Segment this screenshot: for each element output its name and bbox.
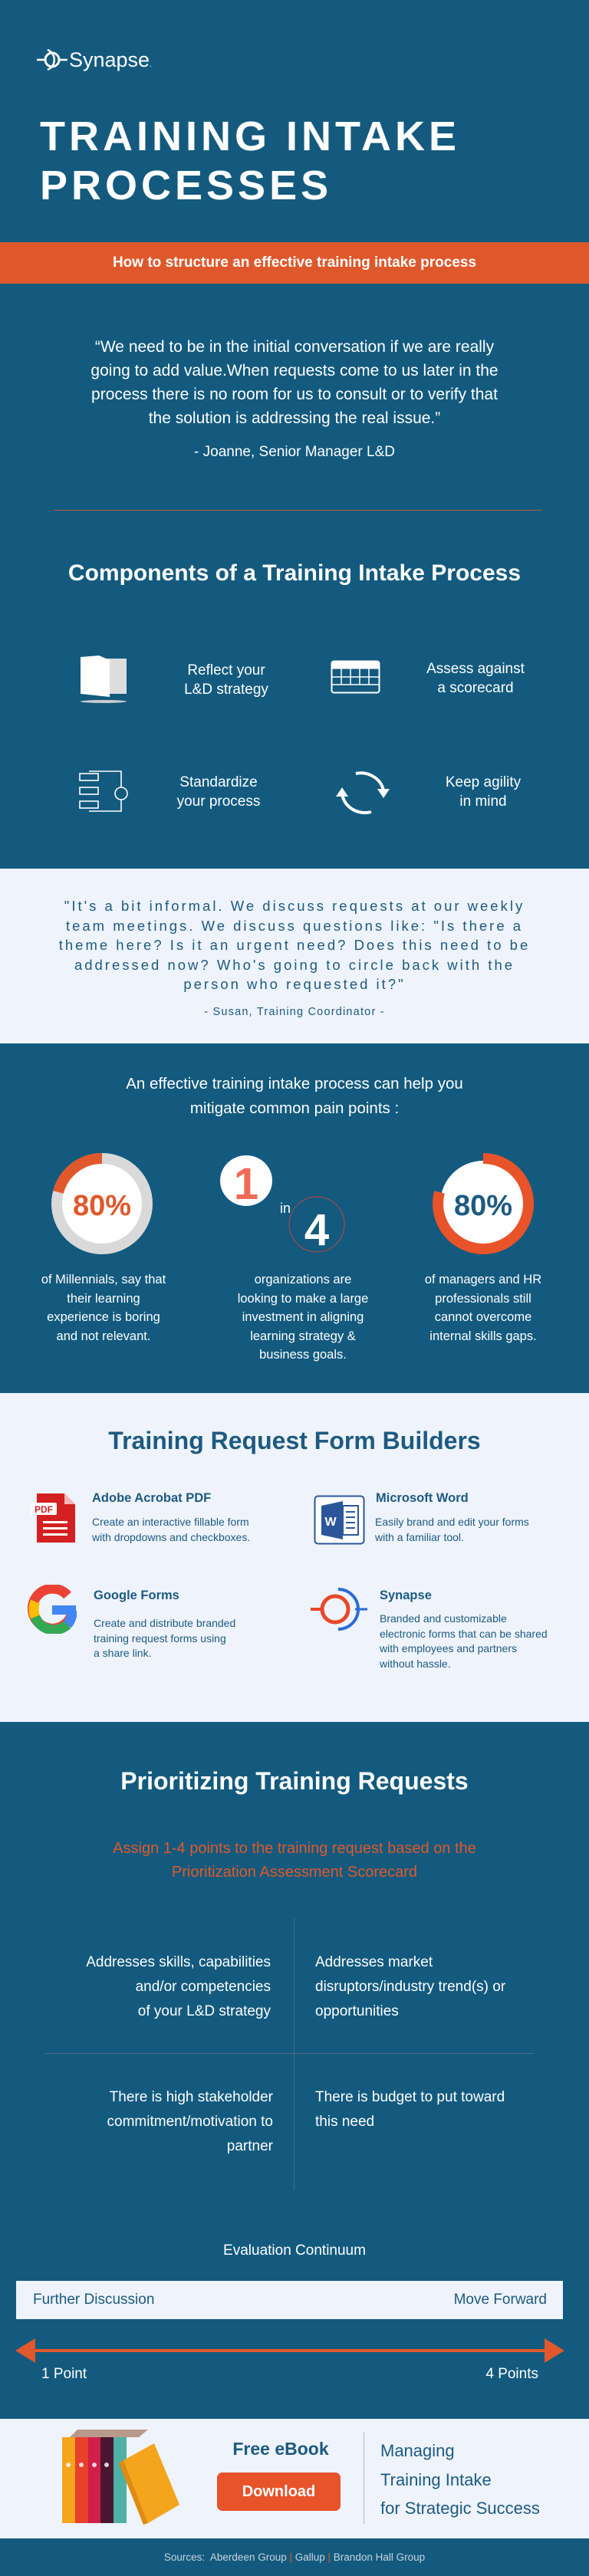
stat: 80% managers: professionals still [435,1291,531,1305]
icon: cycle arrows [336,771,390,814]
item: Synapse: Synapse [380,1589,432,1602]
criterion: stakeholder: There is high stakeholder [110,2089,273,2105]
icon: flowchart [79,770,128,812]
criterion: budget [315,2089,505,2130]
item: Google Forms: Google Forms [94,1589,179,1602]
heading: Training Request Form Builders [108,1427,481,1454]
stat: 80% managers: of managers and HR [425,1273,541,1286]
panel: form builders: without hassle. [380,1658,451,1670]
stat: 1 in 4: in [280,1201,291,1216]
item: Synapse: with employees and partners [380,1642,517,1654]
item: Synapse: Branded and customizable [380,1612,507,1625]
panel: Susan quote: person who requested it?" [183,976,406,992]
criterion: budget: this need [315,2114,374,2130]
criterion: stakeholder: partner [227,2138,273,2154]
stat: 1 in 4: investment in aligning [242,1310,364,1324]
criterion: market: disruptors/industry trend(s) or [315,1979,505,1995]
title: PROCESSES [40,163,332,209]
stat: 80% millennials: of Millennials, say that [41,1273,166,1286]
quote: Joanne: - Joanne, Senior Manager L&D [194,444,395,460]
panel: Susan quote [0,869,589,1043]
component: reflect strategy: L&D strategy [184,682,268,698]
component: agility: Keep agility [446,774,521,790]
stat: 80% managers: 80% [454,1190,512,1222]
continuum bar: Move Forward [454,2292,547,2308]
orange instruction text: Assign 1-4 points to the training request based on the [113,1840,476,1857]
panel: Susan quote: - Susan, Training Coordinator - [204,1006,385,1018]
evaluation continuum: 1 Point [41,2366,87,2382]
stat: 1 in 4: organizations are [255,1273,351,1286]
subtitle band: How to structure an effective training intake process [113,255,476,271]
item: Word: W [324,1516,337,1529]
component: scorecard [331,661,525,696]
component: standardize [79,770,260,812]
panel: Susan quote: addressed now? Who's going to circle back with the [74,957,515,972]
stat: 80% managers: cannot overcome [435,1310,531,1324]
icon: document [81,656,127,703]
intro text: pain points: An effective training intake process can help you [126,1075,463,1092]
logo: Synapse. [69,48,152,71]
download button [217,2472,341,2511]
orange instruction text [113,1840,476,1881]
download button: Download [242,2483,315,2500]
continuum bar [16,2281,563,2319]
heading: prioritizing: Prioritizing Training Requests [120,1767,469,1795]
intro text: pain points [126,1075,463,1117]
criterion: market: Addresses market [315,1954,433,1970]
item: Google Forms [28,1585,235,1659]
component: standardize: your process [177,794,260,810]
panel: Susan quote: team meetings. We discuss questions like: "Is there a [66,917,523,934]
criterion: L&D: and/or competencies [136,1979,271,1995]
component: agility: in mind [459,794,507,810]
icon: table [331,661,380,693]
item: Synapse [311,1588,548,1670]
item: Adobe: with dropdowns and checkboxes. [92,1530,250,1543]
component: reflect strategy: Reflect your [187,662,265,678]
item: Word: Microsoft Word [376,1491,469,1505]
stat: 1 in 4 [220,1155,368,1362]
component: scorecard: a scorecard [437,680,514,696]
ebook title [380,2441,540,2518]
component: standardize: Standardize [179,774,258,790]
free ebook label: Free eBook [232,2439,329,2459]
panel: form builders [0,1393,589,1722]
item: Adobe: Adobe Acrobat PDF [92,1491,211,1505]
scorecard quadrant [44,1918,534,2190]
criterion: stakeholder: commitment/motivation to [107,2114,273,2130]
evaluation continuum: 4 Points [485,2366,538,2382]
subtitle band [0,242,589,284]
stat: 80% millennials: and not relevant. [57,1329,150,1343]
stat: 1 in 4: business goals. [259,1348,347,1362]
panel: Susan quote: theme here? Is it an urgent need? Does this need to be [59,937,530,953]
stat: 80% millennials: experience is boring [47,1310,160,1324]
component: agility [336,771,522,814]
stat: 1 in 4: looking to make a large [238,1291,368,1305]
sources: Sources: Aberdeen Group | Gallup | Brandon Hall Group [164,2551,425,2563]
stat: 1 in 4: learning strategy & [250,1329,356,1343]
component: scorecard: Assess against [426,661,525,677]
stat: 80% millennials: 80% [73,1190,131,1222]
stat: 80% millennials [41,1153,166,1343]
item: Word: Easily brand and edit your forms [375,1516,529,1528]
ebook title: for Strategic Success [380,2499,540,2518]
ebook title: Managing [380,2441,455,2460]
quote: Joanne: process there is no room for us to consult or to verify that [91,386,498,403]
quote: Joanne: the solution is addressing the real issue.” [149,409,440,427]
stat: 1 in 4: 1 [234,1159,258,1209]
title [40,113,460,209]
stat: 80% managers: internal skills gaps. [429,1329,537,1343]
criterion: L&D: of your L&D strategy [138,2003,271,2019]
continuum bar: Further Discussion [33,2292,154,2308]
item: Adobe: Create an interactive fillable form [92,1516,249,1528]
panel: ebook [0,2419,589,2538]
stat: 80% managers [425,1153,541,1343]
item: Word [314,1491,529,1544]
criterion: stakeholder [107,2089,273,2154]
arrow [15,2338,564,2363]
criterion: L&D: Addresses skills, capabilities [86,1954,271,1970]
item: Word: with a familiar tool. [375,1530,464,1543]
title: TRAINING INTAKE [40,113,460,159]
item: Adobe [31,1491,250,1543]
criterion: L&D [86,1954,271,2019]
quote: Joanne: going to add value.When requests come to us later in the [90,362,499,380]
criterion: market: opportunities [315,2003,399,2019]
item: Google Forms: training request forms using [94,1631,226,1644]
stat: 1 in 4: 4 [304,1205,329,1255]
panel: Susan quote: "It's a bit informal. We discuss requests at our weekly [64,898,525,914]
quote: Joanne: “We need to be in the initial conversation if we are really [95,338,494,356]
item: Synapse: electronic forms that can be shared [380,1627,548,1639]
item: Google Forms: Create and distribute branded [94,1617,235,1629]
heading: components: Components of a Training Intake Process [68,560,521,586]
orange instruction text: Prioritization Assessment Scorecard [172,1864,417,1881]
item: Adobe: PDF [35,1504,53,1515]
stat: 80% millennials: their learning [67,1291,140,1305]
quote: Joanne [90,338,499,460]
icon: books [62,2430,179,2525]
component: reflect strategy [81,656,268,703]
criterion: budget: There is budget to put toward [315,2089,505,2105]
item: Google Forms: a share link. [94,1647,151,1659]
criterion: market [315,1954,505,2019]
evaluation continuum: Evaluation Continuum [223,2242,366,2259]
evaluation continuum [15,2242,564,2382]
intro text: pain points: mitigate common pain points : [190,1099,399,1117]
ebook title: Training Intake [380,2470,492,2489]
